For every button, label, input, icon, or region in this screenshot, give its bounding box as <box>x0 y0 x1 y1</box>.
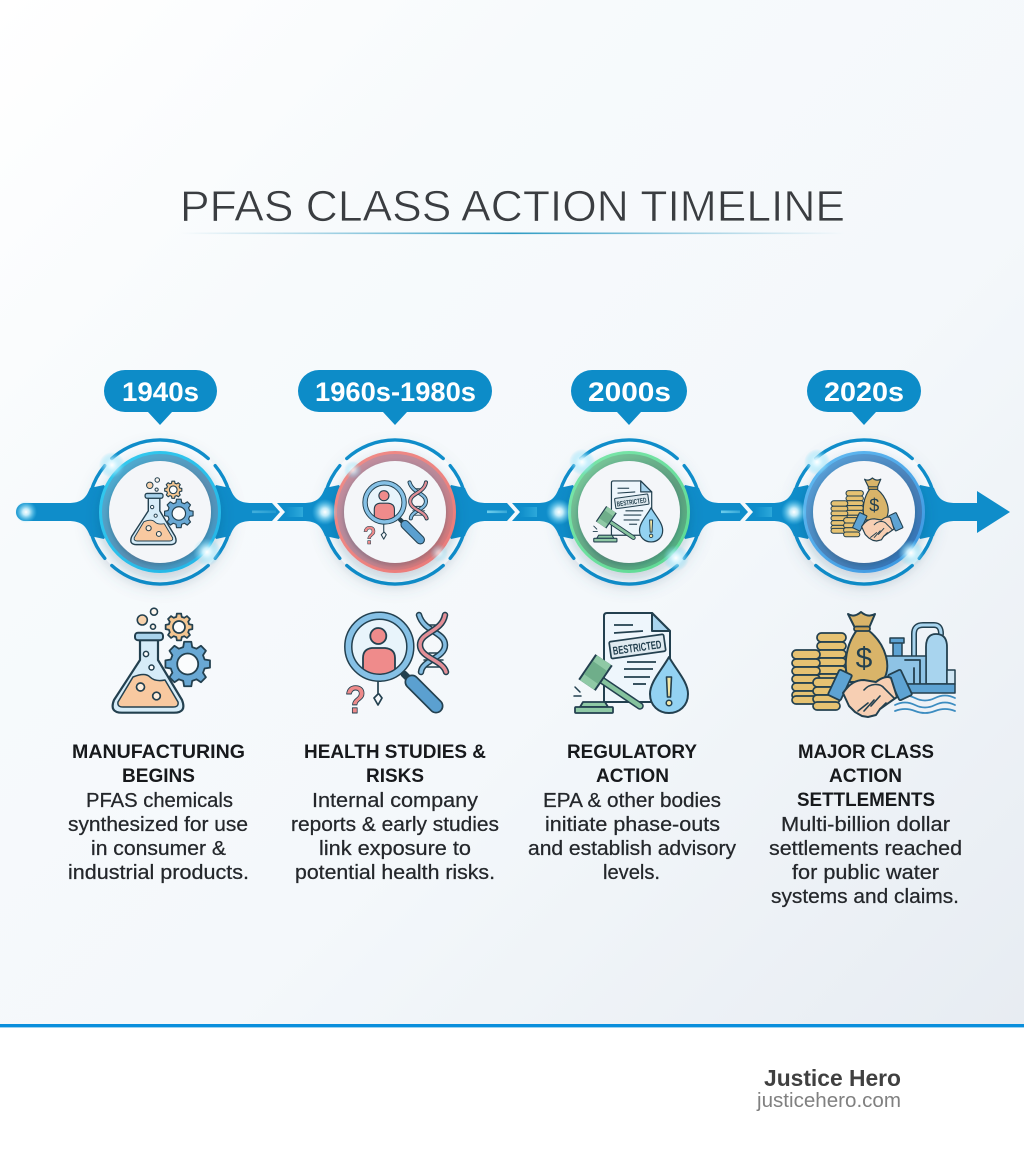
description: for public water <box>792 862 939 884</box>
heading: ACTION <box>596 766 669 787</box>
node 4 medallion: 2020s <box>772 440 956 584</box>
date pill: 1940s: 1940s <box>122 377 199 407</box>
node 4 settlement icon <box>831 478 903 541</box>
heading: ACTION <box>829 766 902 787</box>
node 4 white disc <box>813 461 915 563</box>
node 1 white disc <box>109 461 211 563</box>
heading: SETTLEMENTS <box>797 790 935 811</box>
description: synthesized for use <box>68 814 248 836</box>
description: Multi-billion dollar <box>781 814 950 836</box>
title underline <box>180 232 845 234</box>
node 2 glints <box>312 461 448 562</box>
large icon: coins, money bag and handshake <box>792 612 912 717</box>
description <box>68 790 249 884</box>
node 4 glints <box>781 449 924 566</box>
large icon: flask and gears <box>113 608 210 713</box>
description: Internal company <box>312 790 478 812</box>
node 3 white disc <box>578 461 680 563</box>
node 3 glints <box>546 449 689 571</box>
date pill: 1940s <box>104 370 217 425</box>
description <box>528 790 736 884</box>
description: and establish advisory <box>528 838 736 860</box>
connector highlights <box>15 501 797 523</box>
date pill: 1960s-1980s <box>298 370 492 425</box>
description: link exposure to <box>319 838 471 860</box>
footer brand <box>756 1065 901 1112</box>
column 3 text: regulatory action <box>528 742 736 884</box>
heading <box>797 742 935 811</box>
heading <box>567 742 697 787</box>
description: potential health risks. <box>295 862 495 884</box>
date pill: 2000s: 2000s <box>588 377 671 407</box>
description: settlements reached <box>769 838 962 860</box>
description: PFAS chemicals <box>86 790 233 812</box>
node 3 coloured ring <box>570 452 688 572</box>
description: systems and claims. <box>771 886 959 908</box>
timeline connector with arrow <box>16 491 1010 533</box>
description: in consumer & <box>91 838 227 860</box>
date pill: 2020s: 2020s <box>824 377 904 407</box>
heading: HEALTH STUDIES & <box>304 742 486 763</box>
node 3 medallion: 2000s <box>537 440 721 584</box>
node 4 coloured ring <box>804 452 924 572</box>
description: initiate phase-outs <box>545 814 720 836</box>
heading <box>72 742 245 787</box>
title: PFAS CLASS ACTION TIMELINE <box>180 182 845 231</box>
node 2 magnifier and DNA icon <box>363 482 427 550</box>
large icon: magnifier, person and DNA <box>345 615 446 722</box>
footer brand: Justice Hero <box>764 1065 901 1091</box>
description: reports & early studies <box>291 814 499 836</box>
heading: MAJOR CLASS <box>798 742 934 763</box>
node 1 medallion: 1940s <box>68 440 252 584</box>
node 2 white disc <box>344 461 446 563</box>
node 1 coloured ring <box>100 452 220 572</box>
node 2 coloured ring <box>336 452 454 572</box>
date pill: 2020s <box>807 370 921 425</box>
column 2 text: health studies and risks <box>291 742 499 884</box>
description: EPA & other bodies <box>543 790 721 812</box>
node 2 medallion: 1960s-1980s <box>303 440 487 584</box>
heading <box>304 742 486 787</box>
heading: RISKS <box>366 766 424 787</box>
column 4 text: major class action settlements <box>769 742 962 908</box>
node 3 gavel and document icon <box>593 481 663 542</box>
heading: REGULATORY <box>567 742 697 763</box>
column 1 text: manufacturing begins <box>68 742 249 884</box>
large icon: water treatment plant <box>885 625 955 713</box>
date pill: 1960s-1980s: 1960s-1980s <box>315 377 476 407</box>
node 1 glints <box>99 452 221 566</box>
heading: BEGINS <box>122 766 195 787</box>
date pill: 2000s <box>571 370 687 425</box>
description <box>291 790 499 884</box>
footer band <box>0 1027 1024 1154</box>
description: industrial products. <box>68 862 249 884</box>
heading: MANUFACTURING <box>72 742 245 763</box>
node 1 flask icon <box>131 478 193 545</box>
description <box>769 814 962 908</box>
footer brand: justicehero.com <box>756 1090 901 1112</box>
description: levels. <box>603 862 660 884</box>
footer accent line <box>0 1024 1024 1027</box>
large icon: gavel, restricted document and water drop <box>574 613 688 713</box>
